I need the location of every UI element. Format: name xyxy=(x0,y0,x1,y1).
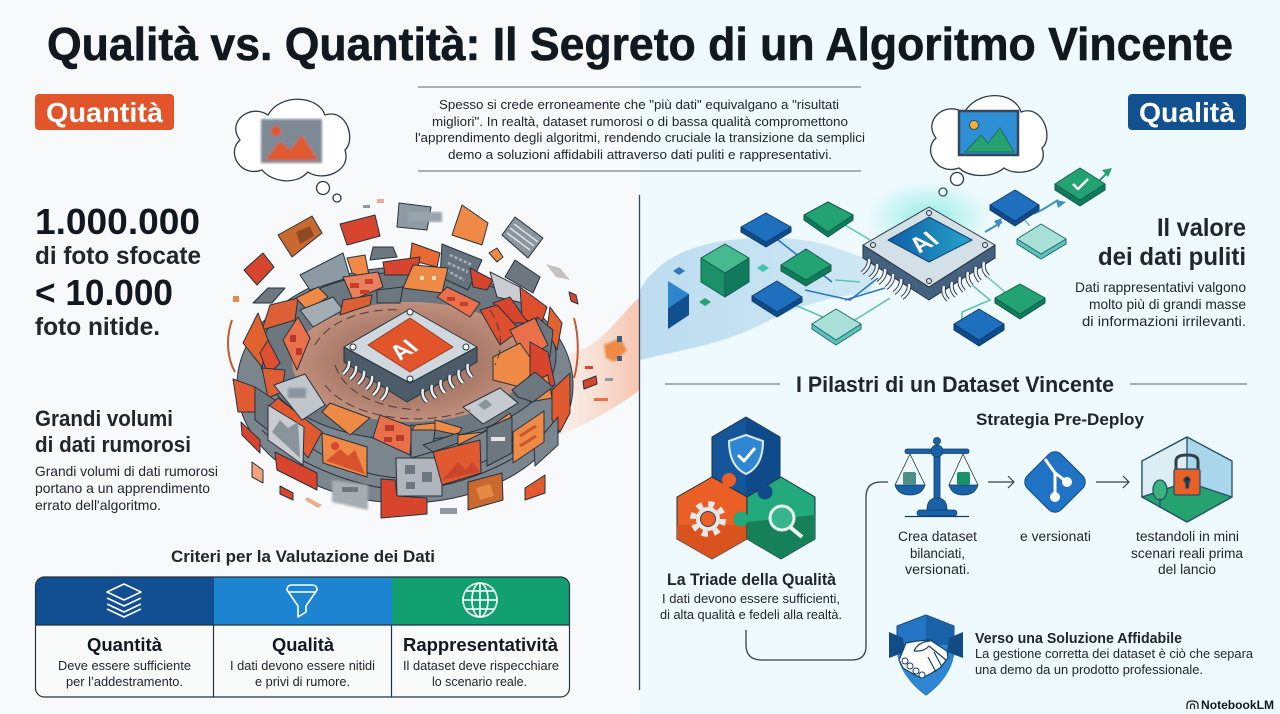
text block: grandi volumi: Grandi volumi xyxy=(35,406,173,431)
drifting fragments on flow xyxy=(583,336,627,401)
arrow xyxy=(988,476,1014,488)
intro text block: demo a soluzioni affidabili attraverso dati puliti e rappresentativi. xyxy=(448,147,832,162)
watermark: NotebookLM: NotebookLM xyxy=(1201,698,1274,712)
side wall fragments xyxy=(228,313,578,432)
text block: triade xyxy=(660,570,842,622)
text block: il valore dei dati puliti xyxy=(1075,214,1246,329)
thought cloud: sharp image xyxy=(931,96,1047,196)
text block: triade: I dati devono essere sufficienti, xyxy=(662,591,840,606)
gear icon xyxy=(693,504,723,534)
illustration: data tiles xyxy=(668,168,1105,346)
column: quantità: Deve essere sufficiente xyxy=(58,658,191,673)
text block: il valore dei dati puliti: molto più di grandi masse xyxy=(1089,297,1246,312)
vertical divider xyxy=(638,195,640,690)
text block: il valore dei dati puliti: dei dati puliti xyxy=(1098,243,1246,271)
badge: Qualità: Qualità xyxy=(1139,97,1235,128)
tile green check xyxy=(1055,168,1105,206)
connector from triad to strategy xyxy=(746,482,888,660)
swirl lines xyxy=(315,310,500,419)
icon: quality triad hexagons xyxy=(677,417,815,559)
AI chip, chaotic xyxy=(343,309,477,402)
front wall fragments xyxy=(241,374,558,518)
comparison statistic: 1.000.000 xyxy=(35,201,200,242)
intro text block: migliori". In realtà, dataset rumorosi o di bassa qualità compromettono xyxy=(432,114,848,129)
comparison statistic: foto nitide. xyxy=(35,313,160,341)
magnifier icon xyxy=(770,506,802,537)
text block: il valore dei dati puliti: Dati rappresentativi valgono xyxy=(1075,280,1246,295)
text block: grandi volumi: portano a un apprendimento xyxy=(35,480,210,496)
flow band: clean data xyxy=(640,238,880,360)
tile green 11 xyxy=(995,284,1045,319)
tile green 2 xyxy=(804,202,853,237)
text block: il valore dei dati puliti: Il valore xyxy=(1157,214,1246,242)
text block: verso una soluzione affidabile: una demo da un prodotto professionale. xyxy=(975,662,1203,677)
column: qualità: I dati devono essere nitidi xyxy=(230,658,375,673)
icon: git branch xyxy=(1021,448,1089,516)
strategy step labels: e versionati xyxy=(1020,529,1091,544)
illustration: chaotic data ring around AI chip xyxy=(228,199,627,518)
tile blue 8 xyxy=(990,190,1039,226)
strategy step labels: testandoli in mini xyxy=(1136,529,1239,544)
heading: criteri: Criteri per la Valutazione dei Dati xyxy=(171,547,435,566)
intro text block xyxy=(415,87,865,171)
strategy step labels: versionati. xyxy=(905,562,970,577)
icon: globe xyxy=(463,583,497,617)
comparison statistic: di foto sfocate xyxy=(35,242,201,270)
text block: verso una soluzione affidabile xyxy=(975,631,1254,677)
intro text block: l'apprendimento degli algoritmi, rendendo cruciale la transizione da semplici xyxy=(415,130,865,145)
column: quantità: per l’addestramento. xyxy=(66,674,183,689)
text block: grandi volumi: errato dell'algoritmo. xyxy=(35,497,161,513)
badge: Quantità: Quantità xyxy=(46,97,163,128)
strategy step labels: del lancio xyxy=(1158,562,1216,577)
column: quantità xyxy=(58,635,191,689)
strategy step labels: scenari reali prima xyxy=(1131,546,1243,561)
icon: layers xyxy=(107,584,141,617)
text block: grandi volumi: Grandi volumi di dati rumorosi xyxy=(35,463,218,479)
AI chip, clean xyxy=(862,207,995,300)
right arrows xyxy=(994,168,1112,228)
icon: balance scale xyxy=(895,438,978,516)
icon: handshake shield xyxy=(889,615,963,695)
column: qualità: Qualità xyxy=(272,635,335,655)
AI chip, clean: AI xyxy=(903,228,945,258)
strategy step labels xyxy=(898,529,1243,577)
text block: verso una soluzione affidabile: La gestione corretta dei dataset è ciò che separa xyxy=(975,646,1254,661)
intro text block: Spesso si crede erroneamente che "più dati" equivalgano a "risultati xyxy=(439,97,839,112)
icon: funnel xyxy=(287,585,317,617)
arrow xyxy=(1096,476,1129,488)
tile light 10 xyxy=(1017,224,1066,259)
heading: pilastri: I Pilastri di un Dataset Vincente xyxy=(796,372,1114,397)
flying fragments top xyxy=(233,199,578,304)
column: rappresentatività: Rappresentatività xyxy=(403,635,559,655)
text block: verso una soluzione affidabile: Verso una Soluzione Affidabile xyxy=(975,631,1182,647)
back wall fragments xyxy=(262,243,562,360)
comparison statistic xyxy=(35,201,201,341)
AI chip, chaotic: AI xyxy=(384,336,425,365)
circuit connections xyxy=(778,172,1108,320)
text block: grandi volumi xyxy=(35,406,218,513)
shield icon xyxy=(729,435,763,474)
criteria table xyxy=(36,577,570,697)
column: qualità: e privi di rumore. xyxy=(255,674,350,689)
text block: il valore dei dati puliti: di informazioni irrilevanti. xyxy=(1082,314,1246,329)
cube green xyxy=(701,244,749,297)
text block: triade: di alta qualità e fedeli alla realtà. xyxy=(660,607,842,622)
column: rappresentatività: Il dataset deve rispecchiare xyxy=(403,658,559,673)
glow behind chip xyxy=(867,180,991,256)
tile blue 12 xyxy=(954,309,1004,346)
tile blue 5 xyxy=(752,281,802,317)
comparison statistic: < 10.000 xyxy=(35,272,173,313)
text block: triade: La Triade della Qualità xyxy=(667,570,837,589)
heading: strategia: Strategia Pre-Deploy xyxy=(976,411,1145,429)
badge: Qualità xyxy=(1128,94,1246,130)
column: rappresentatività: lo scenario reale. xyxy=(432,674,527,689)
flow band: noisy data xyxy=(545,297,640,440)
small flow dots xyxy=(673,264,769,306)
thought cloud: blurry image xyxy=(234,99,350,202)
half cube xyxy=(668,281,689,329)
column: rappresentatività xyxy=(403,635,559,689)
strategy step labels: Crea dataset xyxy=(898,529,977,544)
title: Qualità vs. Quantità: Il Segreto di un Algoritmo Vincente xyxy=(47,18,1233,70)
column: quantità: Quantità xyxy=(87,635,163,655)
tile blue 1 xyxy=(741,213,791,247)
tile light 6 xyxy=(812,309,861,345)
text block: grandi volumi: di dati rumorosi xyxy=(35,432,191,457)
column: qualità xyxy=(230,635,375,689)
icon: sandbox cube with padlock xyxy=(1142,437,1232,522)
strategy step labels: bilanciati, xyxy=(910,546,965,561)
tile green 4 xyxy=(781,249,831,286)
